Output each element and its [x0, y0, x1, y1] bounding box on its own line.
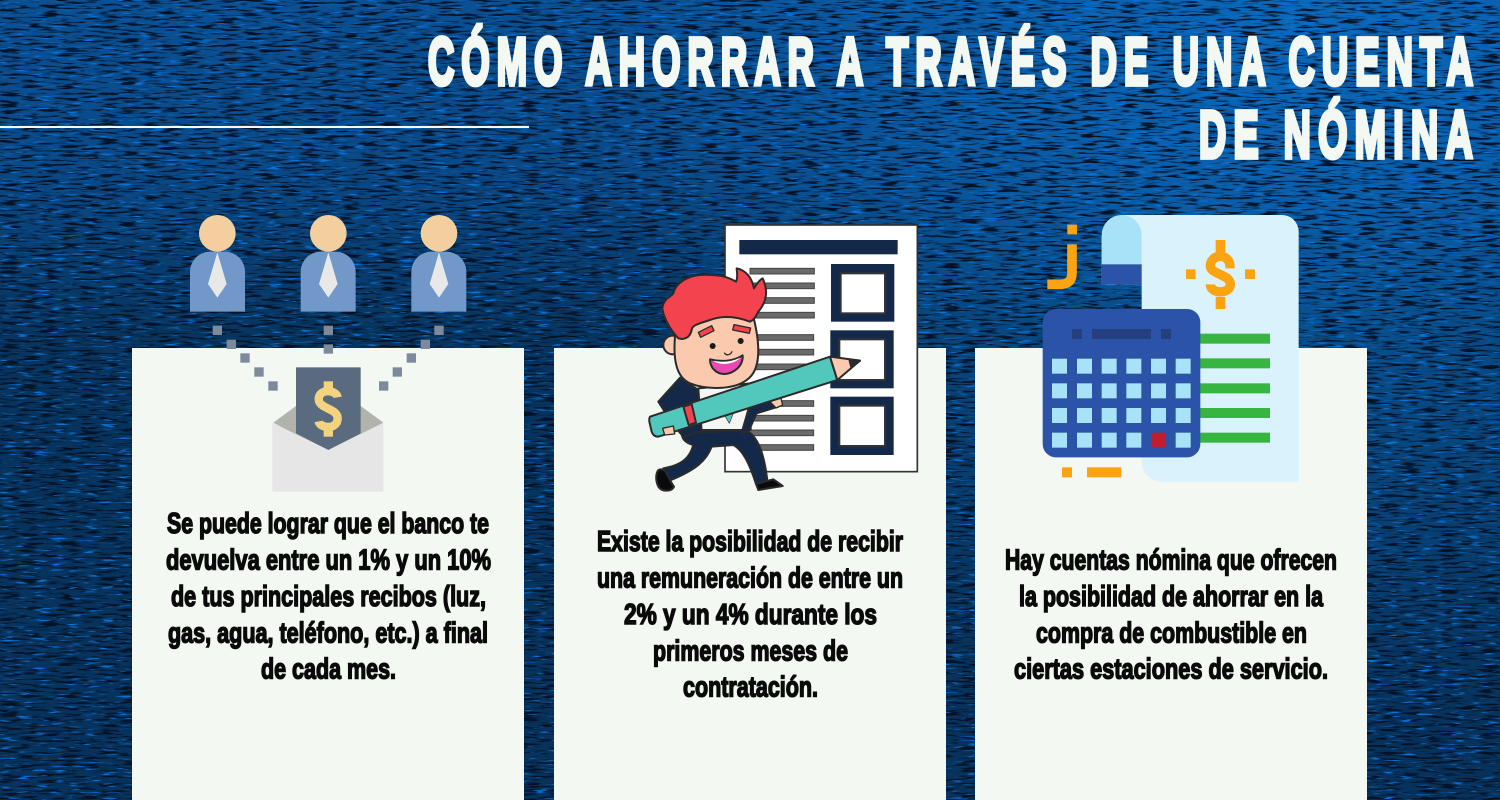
orange j mark [1047, 225, 1077, 284]
icon: envelope with dollar bill [272, 367, 383, 492]
icon: dollar sign [1186, 240, 1255, 309]
face [674, 317, 758, 388]
payslip roll [1102, 215, 1142, 284]
hand front [663, 426, 675, 435]
hand rear [770, 397, 783, 408]
title rule [0, 126, 529, 128]
text block: card 3: compra de combustible en [1036, 618, 1307, 650]
text block: card 2: 2% y un 4% durante los [624, 599, 877, 631]
calendar [1043, 309, 1200, 457]
eyes [710, 343, 716, 349]
panel: card 1 [132, 348, 524, 800]
panel: card 3 [975, 348, 1367, 800]
text block: card 2: primeros meses de [653, 636, 848, 668]
shirt [698, 383, 751, 430]
pencil [649, 357, 860, 437]
checklist sheet [725, 225, 917, 472]
green list lines [1198, 334, 1270, 443]
icon: calendar and payslip [1043, 215, 1299, 482]
orange dashes [1062, 467, 1121, 477]
jacket [658, 378, 778, 437]
legs [663, 431, 767, 484]
tie [724, 413, 733, 423]
man [656, 268, 783, 491]
payslip sheet [1102, 215, 1299, 482]
panel: card 2 [554, 348, 946, 800]
shoes [656, 469, 783, 491]
text block: card 1: de cada mes. [261, 654, 396, 686]
nose [724, 351, 732, 355]
text block: card 1: devuelva entre un 1% y un 10% [166, 544, 491, 576]
text block: card 3: Hay cuentas nómina que ofrecen [1005, 544, 1337, 576]
text block: card 1 [166, 508, 491, 686]
text block: card 1: Se puede lograr que el banco te [167, 508, 489, 540]
dotted connectors [213, 326, 444, 391]
mouth [710, 355, 743, 374]
text block: card 2 [597, 526, 903, 704]
ear [663, 336, 682, 354]
hair [662, 268, 766, 339]
text block: card 2: una remuneración de entre un [597, 562, 903, 594]
text block: card 3: la posibilidad de ahorrar en la [1019, 581, 1324, 613]
icon: employee centre [301, 215, 356, 312]
title [428, 24, 1480, 172]
icon: man with giant pencil and checklist [649, 225, 917, 491]
icon: employee right [411, 215, 466, 312]
text block: card 2: contratación. [683, 672, 818, 704]
text block: card 3 [1005, 544, 1337, 686]
text block: card 1: de tus principales recibos (luz, [171, 581, 486, 613]
text block: card 1: gas, agua, teléfono, etc.) a final [168, 618, 488, 650]
icon: employee left [190, 215, 245, 312]
text block: card 3: ciertas estaciones de servicio. [1014, 654, 1328, 686]
text block: card 2: Existe la posibilidad de recibir [597, 526, 903, 558]
icon: three employees sending money to an envelope [190, 215, 466, 492]
eyebrows [698, 326, 714, 337]
